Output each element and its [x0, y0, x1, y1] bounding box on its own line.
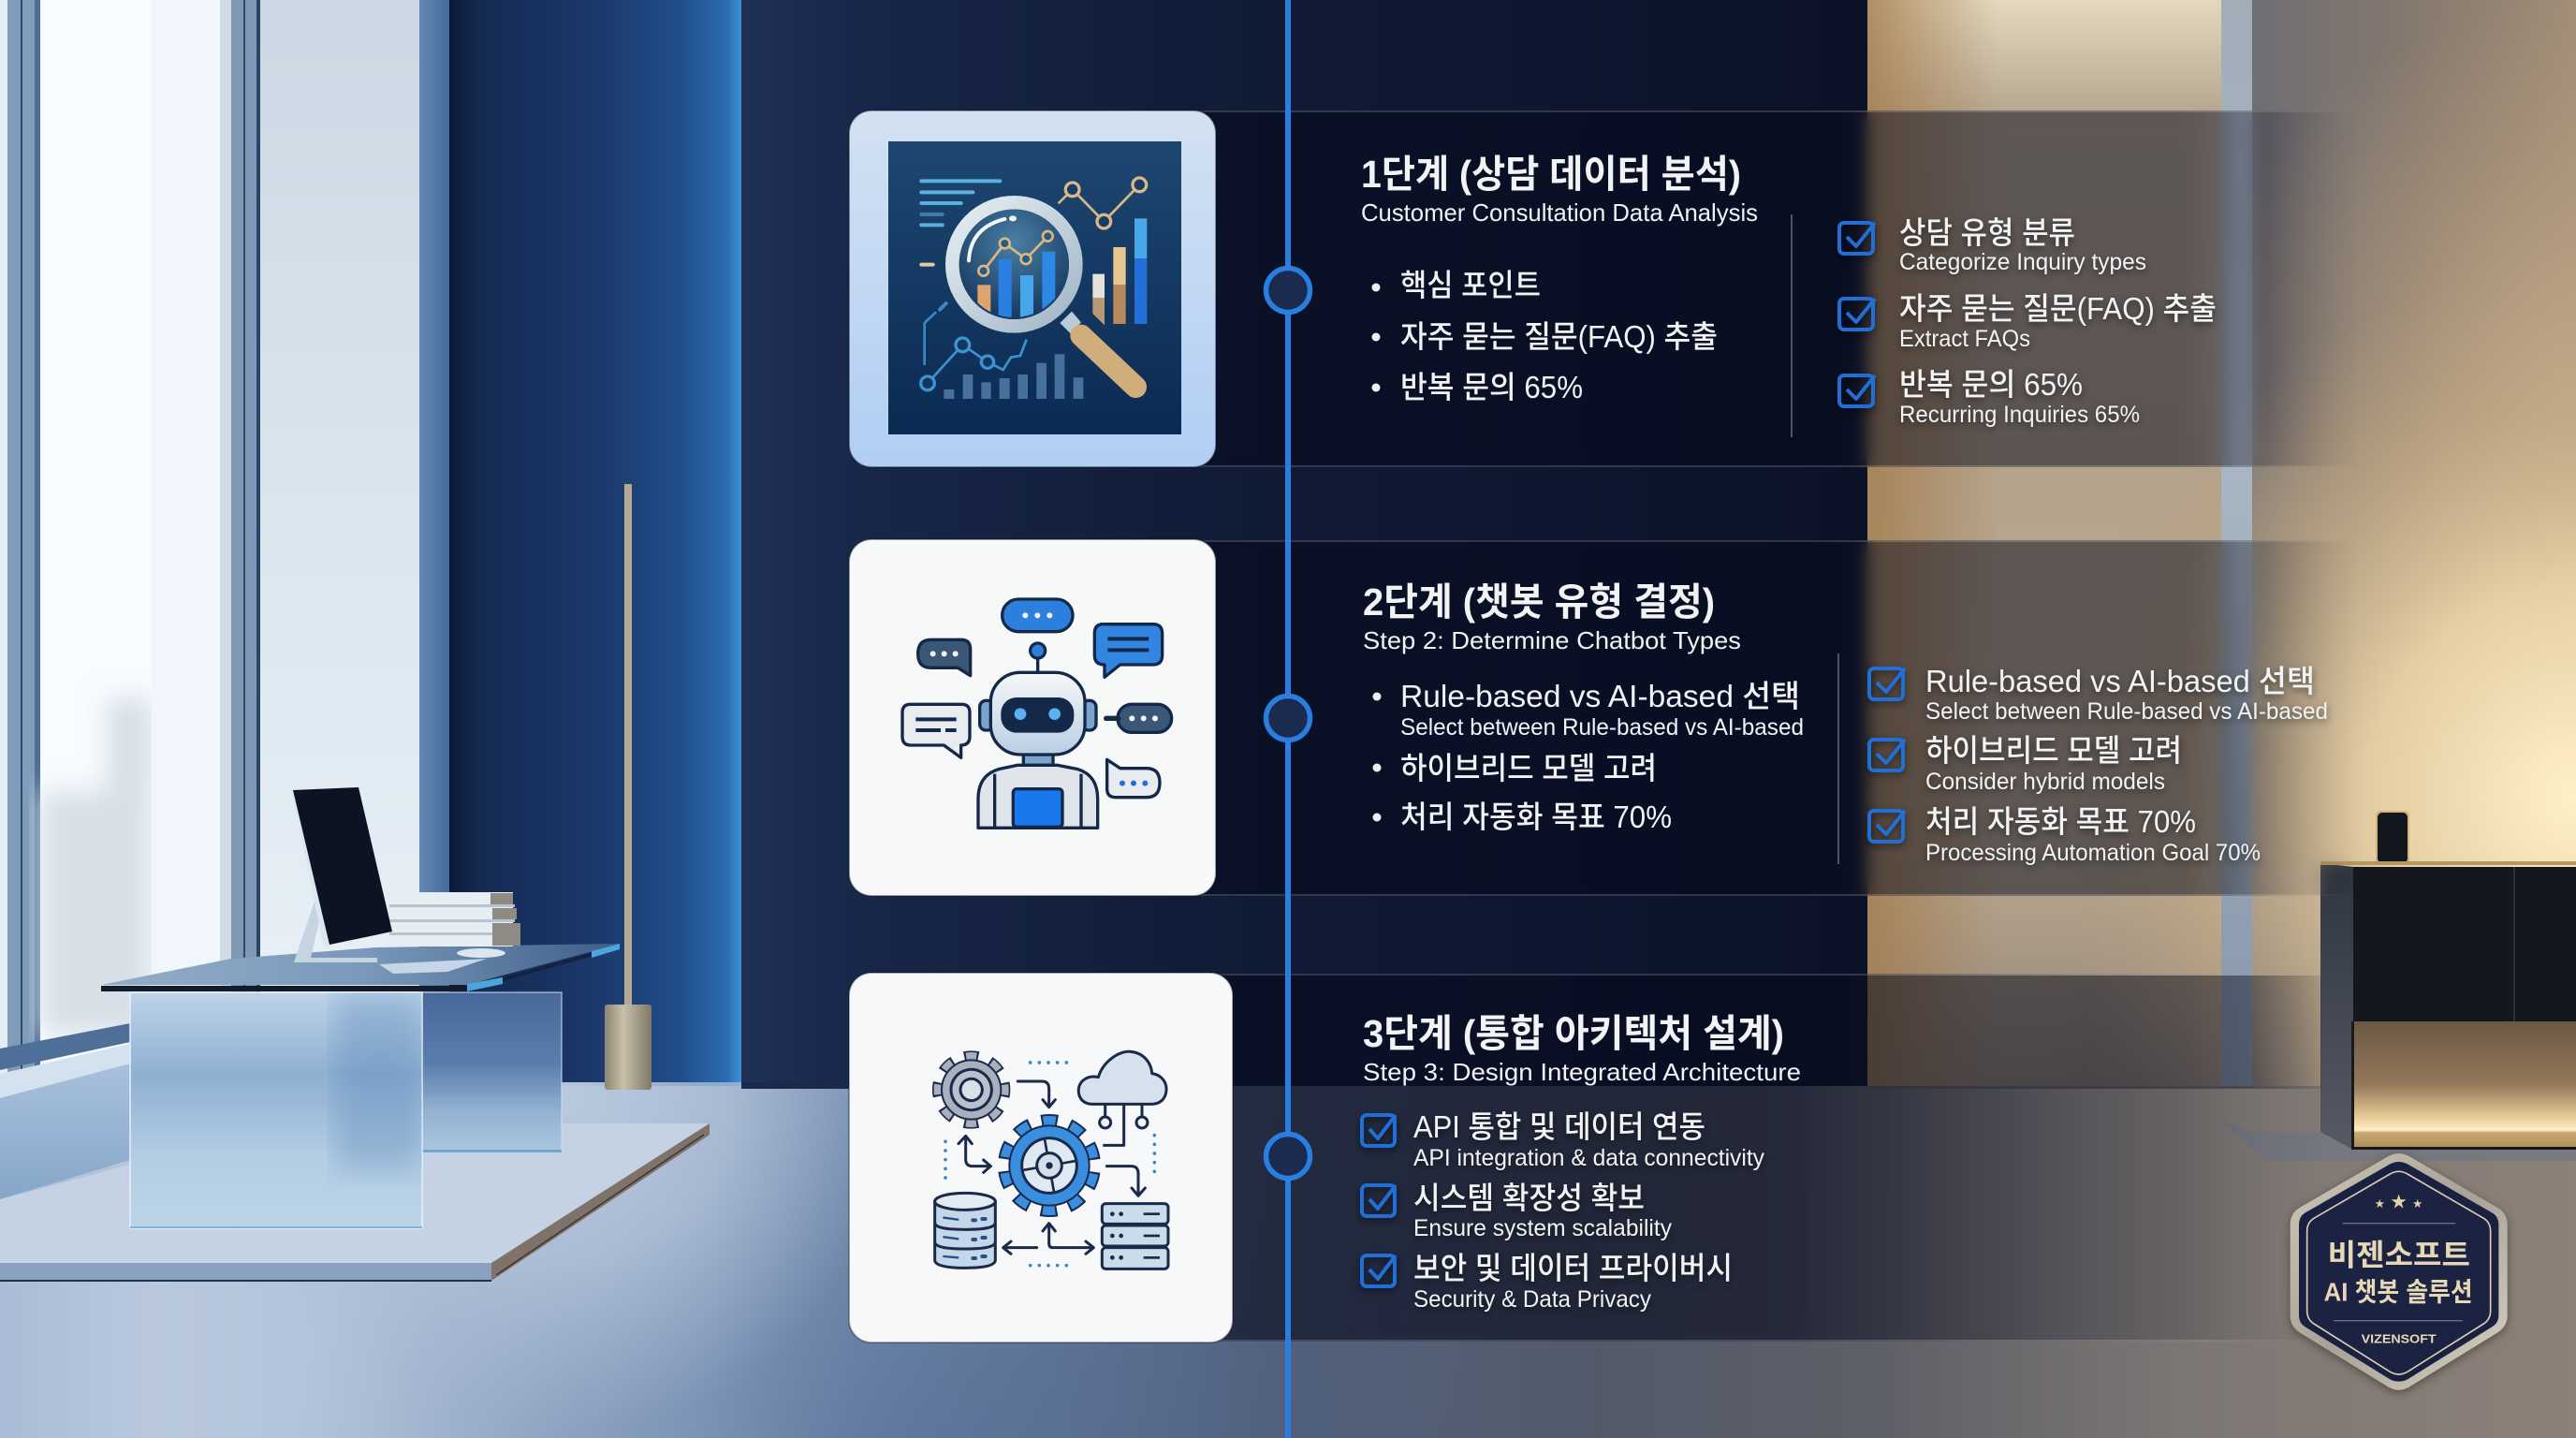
checklist step 2: 처리 자동화 목표 70%: [1925, 804, 2196, 839]
step 3: [849, 973, 1801, 1343]
timeline line: [1285, 0, 1291, 1438]
icon card: integrated architecture: [849, 973, 1233, 1343]
title step 2: Step 2: Determine Chatbot Types: [1363, 626, 1741, 654]
checklist step 1: Extract FAQs: [1899, 326, 2030, 352]
badge text: [2324, 1239, 2473, 1345]
books: [389, 892, 520, 946]
icon card: chatbot: [849, 539, 1216, 896]
bullet list step 2: Rule-based vs AI-based 선택: [1400, 679, 1800, 713]
icon card: data analysis: [849, 110, 1216, 467]
foreground: timeline, steps and badge: [848, 0, 2512, 1438]
blue gear: [999, 1115, 1100, 1216]
checklist step 2: Consider hybrid models: [1925, 769, 2165, 795]
title step 2: 2단계 (챗봇 유형 결정): [1363, 580, 1715, 624]
window sill and lower wall: [0, 1023, 421, 1199]
warm right wall: [1867, 0, 2576, 1132]
badge: Vizensoft AI chatbot solution: [2291, 1153, 2508, 1390]
stars: ★: [2375, 1196, 2385, 1211]
title step 3: [1363, 1012, 1801, 1086]
checklist step 1: Recurring Inquiries 65%: [1899, 402, 2140, 428]
checklist step 2: Rule-based vs AI-based 선택: [1925, 664, 2315, 698]
stars: [2375, 1191, 2422, 1213]
bullet list step 2: Select between Rule-based vs AI-based: [1400, 714, 1804, 741]
checklist step 2: Select between Rule-based vs AI-based: [1925, 698, 2328, 725]
checklist step 3: [1362, 1109, 1764, 1313]
title step 3: 3단계 (통합 아키텍처 설계): [1363, 1012, 1784, 1055]
title step 1: Customer Consultation Data Analysis: [1361, 198, 1758, 227]
dark central wall: [741, 0, 1867, 1089]
checklist step 2: Processing Automation Goal 70%: [1925, 840, 2261, 866]
timeline node 1: [1266, 268, 1310, 313]
checklist step 1: Categorize Inquiry types: [1899, 249, 2146, 275]
bullet list step 2: 하이브리드 모델 고려: [1400, 751, 1657, 785]
checklist step 3: API integration & data connectivity: [1413, 1145, 1764, 1171]
badge text: VIZENSOFT: [2362, 1332, 2437, 1345]
title step 1: [1361, 153, 1758, 227]
floor: [0, 1082, 2576, 1438]
glass desk: [101, 944, 621, 1228]
checklist step 1: 자주 묻는 질문(FAQ) 추출: [1899, 291, 2217, 326]
checklist step 3: API 통합 및 데이터 연동: [1413, 1109, 1705, 1144]
bullet list step 2: [1372, 679, 1804, 834]
checklist step 3: Security & Data Privacy: [1413, 1286, 1651, 1313]
title step 2: [1363, 580, 1741, 654]
checklist step 1: 반복 문의 65%: [1899, 367, 2083, 402]
checklist step 2: [1869, 664, 2328, 866]
bullet list step 2: 처리 자동화 목표 70%: [1400, 800, 1672, 834]
checklist step 3: 보안 및 데이터 프라이버시: [1413, 1251, 1733, 1285]
step 1: [849, 110, 2217, 467]
title step 1: 1단계 (상담 데이터 분석): [1361, 153, 1741, 196]
divider step 1: [1791, 214, 1793, 437]
step 2: [849, 539, 2328, 896]
bullet list step 1: 핵심 포인트: [1400, 268, 1541, 302]
panel band: step 3: [1217, 974, 2321, 1342]
blue accent wall: [449, 0, 741, 1086]
panel band: step 1: [1198, 110, 2359, 467]
arrows: [959, 1081, 1145, 1254]
cloud: [1078, 1051, 1166, 1145]
tablet on desk: [292, 787, 505, 974]
dotted links: [945, 1063, 1154, 1266]
panel band: step 2: [1198, 540, 2359, 896]
timeline node 2: [1266, 697, 1310, 740]
checklist step 3: 시스템 확장성 확보: [1413, 1181, 1645, 1215]
floor slab: [0, 1110, 710, 1281]
window and left wall: [0, 0, 449, 1086]
server rack: [1102, 1204, 1168, 1269]
badge text: AI 챗봇 솔루션: [2324, 1277, 2473, 1306]
bullet list step 1: 반복 문의 65%: [1400, 370, 1583, 404]
bullet list step 1: [1372, 268, 1718, 404]
title step 3: Step 3: Design Integrated Architecture: [1363, 1058, 1801, 1086]
stars: ★: [2412, 1196, 2422, 1211]
sideboard cabinet: [2320, 811, 2576, 1150]
gray gear: [932, 1050, 1010, 1129]
checklist step 1: [1839, 215, 2217, 428]
stars: ★: [2390, 1191, 2408, 1213]
checklist step 2: 하이브리드 모델 고려: [1925, 733, 2182, 768]
badge text: 비젠소프트: [2328, 1239, 2470, 1272]
divider step 2: [1837, 653, 1839, 864]
checklist step 1: 상담 유형 분류: [1899, 215, 2075, 250]
database: [935, 1193, 995, 1268]
floor lamp: [605, 484, 651, 1090]
checklist step 3: Ensure system scalability: [1413, 1215, 1672, 1241]
band 3 upper wall shade: [1867, 976, 2321, 1089]
timeline node 3: [1266, 1135, 1310, 1178]
bullet list step 1: 자주 묻는 질문(FAQ) 추출: [1400, 319, 1718, 354]
